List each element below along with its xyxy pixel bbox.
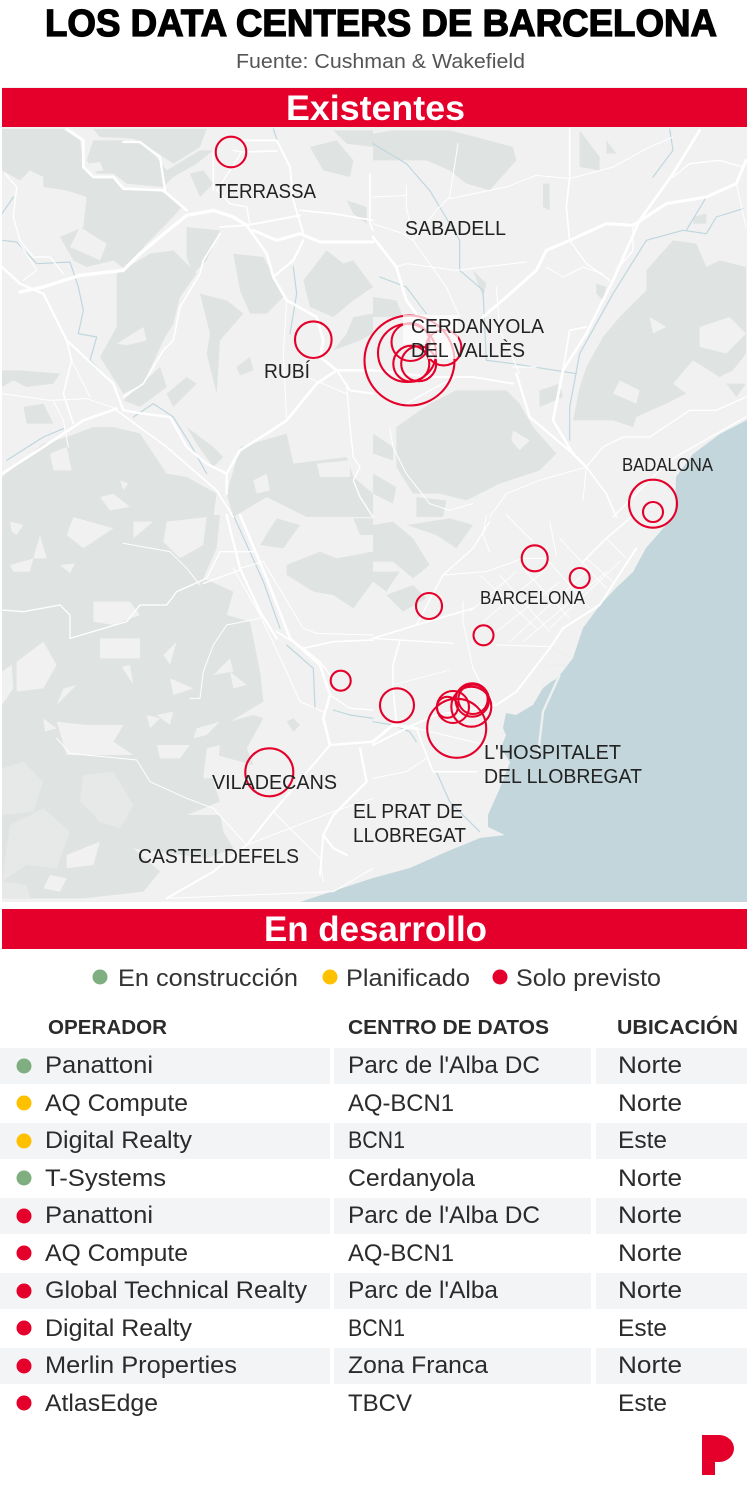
row 8: [16, 1315, 667, 1342]
table header: CENTRO DE DATOS: [348, 1017, 549, 1039]
row stripes: [0, 1048, 747, 1384]
legend: [92, 965, 661, 992]
table header: OPERADOR: [48, 1017, 168, 1039]
table: projects in development: [0, 1015, 747, 1417]
row 7: Parc de l'Alba: [348, 1277, 499, 1304]
city labels: TERRASSA: [215, 181, 317, 203]
row 2: AQ-BCN1: [348, 1090, 454, 1117]
icon: publisher logo P: [702, 1435, 734, 1475]
row 4: Norte: [618, 1165, 682, 1192]
city labels: CERDANYOLA: [411, 316, 545, 338]
row 5: Norte: [618, 1202, 682, 1229]
heading: En desarrollo: [2, 909, 747, 949]
row 3: BCN1: [348, 1127, 405, 1154]
row 7: Global Technical Realty: [45, 1277, 307, 1304]
data center circles: other sites: [216, 137, 677, 796]
row 6: Norte: [618, 1240, 682, 1267]
title: LOS DATA CENTERS DE BARCELONA: [45, 3, 717, 45]
city labels: BADALONA: [622, 455, 713, 475]
row 4: Cerdanyola: [348, 1165, 476, 1192]
row 9: Zona Franca: [348, 1352, 489, 1379]
row 2: Norte: [618, 1090, 682, 1117]
row 8: BCN1: [348, 1315, 405, 1342]
row 1: Panattoni: [45, 1052, 153, 1079]
map quadrant: south-east forest: [373, 518, 473, 612]
row 9: Norte: [618, 1352, 682, 1379]
heading: Existentes: [2, 88, 747, 128]
data center circles: Cerdanyola cluster: [364, 315, 461, 406]
row 4: T-Systems: [45, 1165, 166, 1192]
row 10: TBCV: [348, 1390, 412, 1417]
row 5: [16, 1202, 682, 1229]
row 8: Este: [618, 1315, 667, 1342]
row 6: AQ Compute: [45, 1240, 188, 1267]
city labels: SABADELL: [405, 218, 506, 240]
map quadrant: north-east: [373, 130, 746, 517]
legend: Solo previsto: [516, 965, 661, 992]
legend: En construcción: [118, 965, 298, 992]
row 7: Norte: [618, 1277, 682, 1304]
panel: map of existing data centers: [2, 87, 747, 902]
row 6: AQ-BCN1: [348, 1240, 454, 1267]
heading: En desarrollo: En desarrollo: [264, 910, 487, 949]
row 8: Digital Realty: [45, 1315, 192, 1342]
subtitle: source: Fuente: Cushman & Wakefield: [236, 51, 525, 73]
row 4: [16, 1165, 682, 1192]
city labels: LLOBREGAT: [353, 825, 466, 847]
city labels: EL PRAT DE: [353, 801, 463, 823]
row 1: Parc de l'Alba DC: [348, 1052, 540, 1079]
city labels: BARCELONA: [480, 588, 585, 608]
city labels: VILADECANS: [212, 772, 337, 794]
Barcelona street grid: [470, 562, 620, 642]
map quadrant: south-west: [2, 515, 373, 898]
row 1: Norte: [618, 1052, 682, 1079]
map quadrant: north-west: [2, 129, 373, 517]
row 3: [16, 1127, 667, 1154]
row 6: [16, 1240, 682, 1267]
row 9: Merlin Properties: [45, 1352, 237, 1379]
row 3: Este: [618, 1127, 667, 1154]
city labels: DEL VALLÈS: [411, 339, 525, 362]
sea: [300, 420, 747, 902]
row 2: [16, 1090, 682, 1117]
city labels: RUBÍ: [264, 360, 310, 383]
row 5: Parc de l'Alba DC: [348, 1202, 540, 1229]
Llobregat breakwater and port: [538, 648, 573, 755]
row 10: AtlasEdge: [45, 1390, 158, 1417]
row 10: Este: [618, 1390, 667, 1417]
row 1: [16, 1052, 682, 1079]
table header: [48, 1015, 738, 1039]
city labels: [138, 181, 713, 868]
row 5: Panattoni: [45, 1202, 153, 1229]
row 7: [16, 1277, 682, 1304]
city labels: CASTELLDEFELS: [138, 846, 299, 868]
heading: Existentes: Existentes: [286, 89, 465, 128]
city labels: L'HOSPITALET: [484, 742, 621, 764]
road network: [2, 129, 746, 898]
table header: UBICACIÓN: [617, 1015, 738, 1039]
row 10: [16, 1390, 667, 1417]
row 3: Digital Realty: [45, 1127, 192, 1154]
rivers: [2, 129, 743, 832]
row 2: AQ Compute: [45, 1090, 188, 1117]
row 9: [16, 1352, 682, 1379]
legend: Planificado: [346, 965, 470, 992]
city labels: DEL LLOBREGAT: [484, 766, 642, 788]
